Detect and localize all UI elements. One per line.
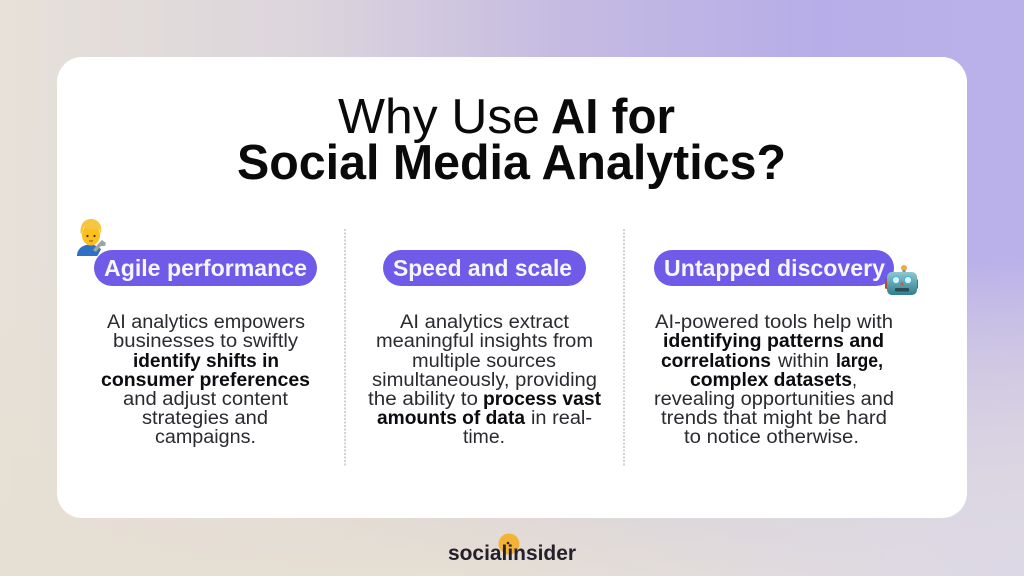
heading pill: speed and scale: Speed and scale bbox=[393, 255, 572, 281]
body text: agile performance: consumer preferences bbox=[101, 370, 310, 391]
heading pill: agile performance bbox=[94, 250, 317, 286]
body text: speed and scale: multiple sources bbox=[412, 351, 556, 372]
title: Social Media Analytics? bbox=[237, 136, 786, 190]
body text: agile performance: strategies and bbox=[142, 408, 268, 429]
body text: untapped discovery: revealing opportunities and bbox=[654, 389, 894, 410]
body text: agile performance: and adjust content bbox=[123, 389, 289, 410]
title: AI for bbox=[551, 90, 675, 144]
panel: white card bbox=[57, 57, 967, 518]
title: Why Use bbox=[338, 90, 540, 144]
body text: untapped discovery: correlations bbox=[661, 351, 771, 372]
icon: robot emoji bbox=[885, 265, 918, 295]
body text: agile performance: campaigns. bbox=[155, 427, 256, 448]
heading pill: agile performance: Agile performance bbox=[104, 255, 307, 281]
heading pill: untapped discovery: Untapped discovery bbox=[664, 255, 885, 281]
panel: untapped discovery bbox=[654, 250, 918, 448]
body text: speed and scale: AI analytics extract bbox=[400, 312, 570, 333]
body text: untapped discovery: within bbox=[777, 351, 829, 372]
logo: socialinsider: socialinsider bbox=[448, 542, 576, 565]
body text: agile performance bbox=[101, 312, 310, 448]
icon: mechanic emoji bbox=[77, 219, 106, 256]
body text: agile performance: businesses to swiftly bbox=[113, 331, 299, 352]
body text: untapped discovery: complex datasets bbox=[690, 370, 852, 391]
body text: speed and scale: the ability to bbox=[368, 389, 478, 410]
body text: speed and scale: process vast bbox=[483, 389, 602, 410]
heading pill: untapped discovery bbox=[654, 250, 894, 286]
body text: untapped discovery: to notice otherwise. bbox=[684, 427, 859, 448]
body text: speed and scale: simultaneously, providing bbox=[372, 370, 597, 391]
body text: speed and scale: meaningful insights from bbox=[376, 331, 593, 352]
body text: agile performance: AI analytics empowers bbox=[107, 312, 305, 333]
body text: untapped discovery: trends that might be hard bbox=[661, 408, 887, 429]
title bbox=[237, 90, 786, 190]
panel: agile performance bbox=[77, 219, 317, 448]
body text: speed and scale: amounts of data bbox=[377, 408, 525, 429]
body text: untapped discovery: , bbox=[852, 370, 857, 391]
body text: speed and scale: in real- bbox=[531, 408, 592, 429]
body text: untapped discovery: AI-powered tools help with bbox=[655, 312, 893, 333]
body text: untapped discovery: large, bbox=[836, 351, 883, 372]
body text: untapped discovery: identifying patterns and bbox=[663, 331, 884, 352]
body text: speed and scale: time. bbox=[463, 427, 505, 448]
panel: speed and scale bbox=[368, 250, 602, 448]
heading pill: speed and scale bbox=[383, 250, 586, 286]
body text: agile performance: identify shifts in bbox=[133, 351, 279, 372]
body text: untapped discovery bbox=[654, 312, 894, 448]
body text: speed and scale bbox=[368, 312, 602, 448]
